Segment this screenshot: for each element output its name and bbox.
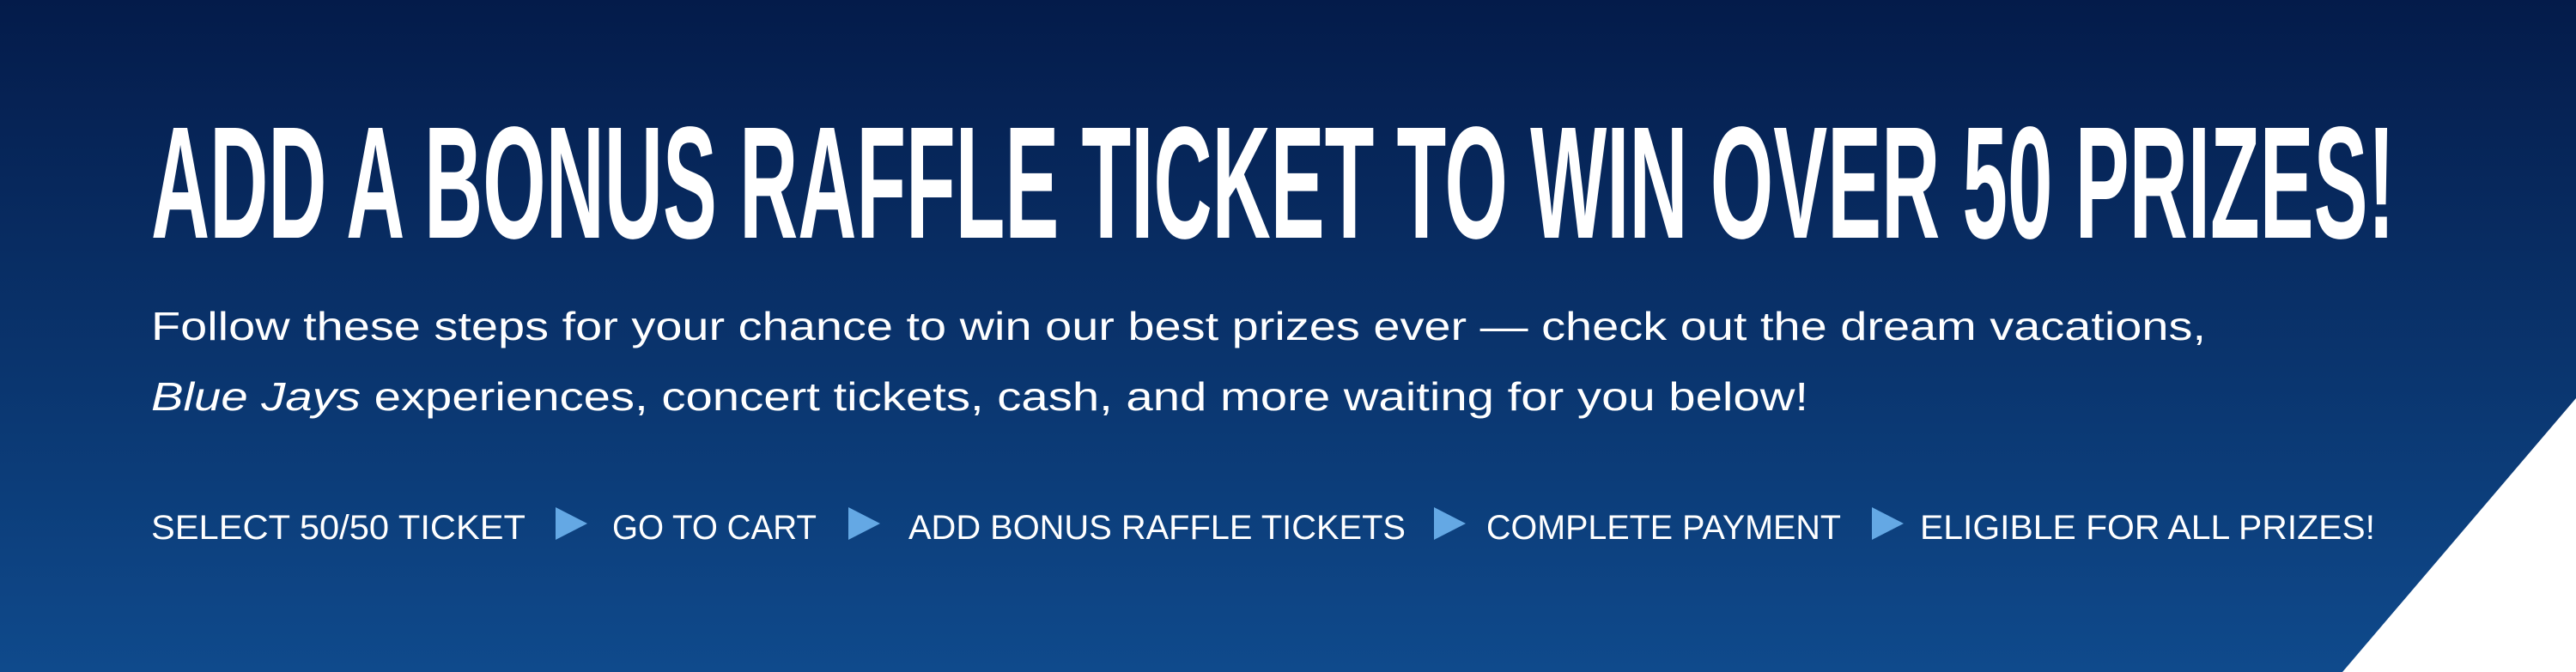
step 4: COMPLETE PAYMENT <box>1486 509 1841 547</box>
step 5: ELIGIBLE FOR ALL PRIZES! <box>1920 509 2375 547</box>
arrow 1 <box>556 507 587 540</box>
arrow 3 <box>1434 507 1466 540</box>
subtitle text block: Follow these steps for your chance to win our best prizes ever — check out the dream vacations, <box>151 304 2206 348</box>
subtitle text block: Blue Jays experiences, concert tickets, cash, and more waiting for you below! <box>151 374 1808 419</box>
step 3: ADD BONUS RAFFLE TICKETS <box>908 509 1406 547</box>
white corner triangle <box>2342 398 2576 672</box>
step 2: GO TO CART <box>612 509 817 547</box>
steps row <box>151 507 2375 547</box>
arrow 2 <box>848 507 880 540</box>
subtitle text block <box>151 304 2206 419</box>
arrow 4 <box>1872 507 1904 540</box>
step 1: SELECT 50/50 TICKET <box>151 509 526 547</box>
